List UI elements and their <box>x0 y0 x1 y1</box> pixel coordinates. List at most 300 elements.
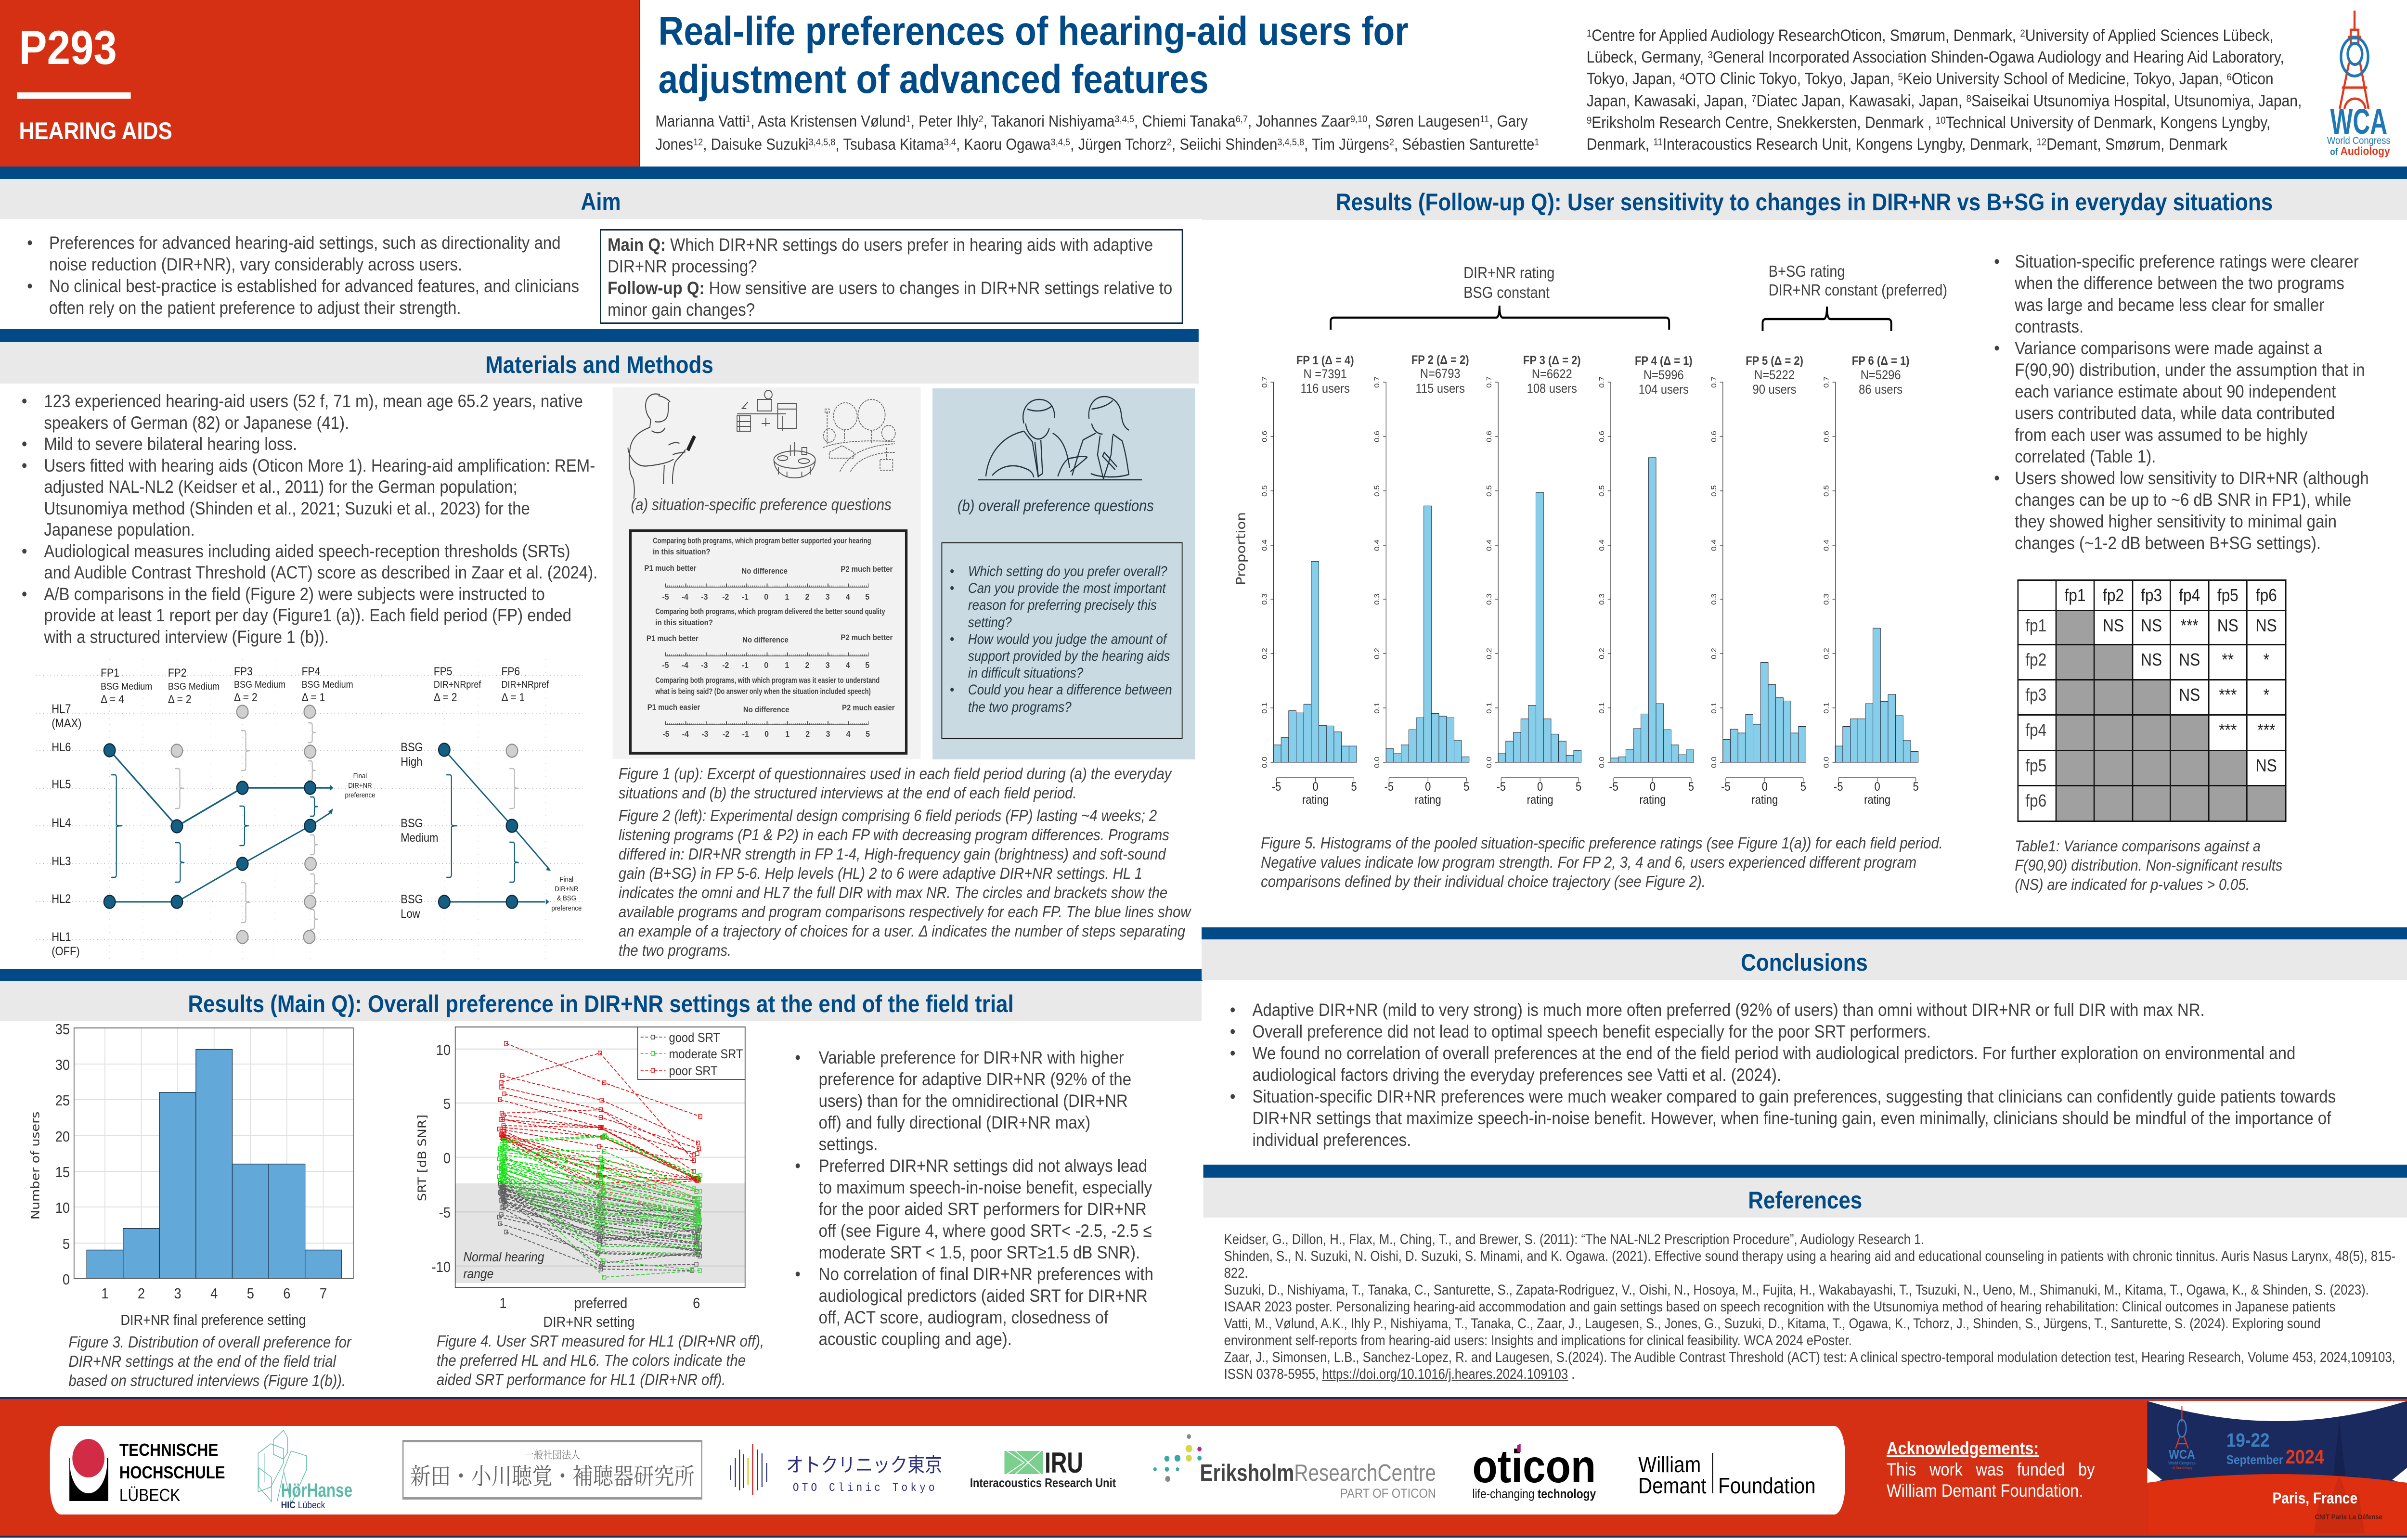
overall questions box: Which setting do you prefer overall? <box>968 564 1167 579</box>
questionnaire box: 2 <box>805 592 809 602</box>
text: • <box>1994 338 2000 358</box>
figures 1 and 2 caption: indicates the omni and HL7 the full DIR with max NR. The circles and brackets show the <box>619 884 1167 902</box>
text: • <box>27 232 33 253</box>
table 1: variance comparisons: NS <box>2179 685 2200 705</box>
questionnaire box: 2 <box>805 729 810 739</box>
figures 1 and 2 caption: Figure 2 (left): Experimental design comprising 6 field periods (FP) lasting ~4 weeks; 2 <box>619 807 1157 825</box>
research questions box: minor gain changes? <box>608 299 755 320</box>
questionnaire box: Comparing both programs, with which program was it easier to understand <box>655 676 880 685</box>
help level labels: HL4 <box>52 816 71 829</box>
dotted grid <box>36 675 583 939</box>
overall questions box: • <box>950 564 954 579</box>
questionnaire box: P2 much easier <box>842 704 895 712</box>
text: • <box>22 391 27 411</box>
histogram FP5: 0.4 <box>1710 539 1718 551</box>
results main bullet text: users) than for the omnidirectional (DIR+NR <box>819 1091 1128 1111</box>
histogram FP6: 5 <box>1913 780 1919 793</box>
histogram FP6: rating <box>1864 793 1890 806</box>
figure 5: histograms of situation-specific ratings <box>1227 260 1963 813</box>
results main bullet text: settings. <box>819 1134 878 1154</box>
normal hearing label: Normal hearing <box>463 1249 544 1264</box>
heading: Results (Main Q) <box>0 981 1202 1021</box>
questionnaire box: 5 <box>865 660 869 670</box>
panel b caption: (b) overall preference questions <box>958 497 1154 514</box>
help level labels: (OFF) <box>52 945 80 958</box>
panel: situation-specific preference questions <box>613 387 920 759</box>
WCA congress banner <box>2147 1401 2407 1533</box>
logo: Shinden-Ogawa institute: 新田・小川聴覚・補聴器研究所 <box>410 1464 695 1489</box>
group label: DIR+NR rating: BSG constant <box>1463 283 1550 301</box>
table 1: variance comparisons: *** <box>2219 685 2237 705</box>
methods bullet text: Audiological measures including aided speech-reception thresholds (SRTs) <box>44 541 570 561</box>
methods bullet text: adjusted NAL-NL2 (Keidser et al., 2011) for the German population; <box>44 476 518 497</box>
histogram FP4: 0.1 <box>1598 702 1606 714</box>
results follow-up bullet text: users contributed data, while data contributed <box>2015 403 2335 423</box>
text: • <box>27 276 33 296</box>
affiliations: 1Centre for Applied Audiology ResearchOticon, Smørum, Denmark, 2University of Applied Sciences Lübeck, <box>1587 26 2274 45</box>
histogram FP3: 0.6 <box>1486 431 1493 442</box>
trajectory lines and arrows <box>110 750 551 905</box>
histogram FP4: 0.4 <box>1598 539 1606 551</box>
topic label <box>17 92 172 144</box>
figures 1 and 2 caption: the two programs. <box>619 942 731 960</box>
text: • <box>1230 999 1235 1019</box>
figure 3 caption <box>68 1333 351 1391</box>
brace: DIR+NR group <box>1331 306 1669 330</box>
logo: Eriksholm Research Centre: EriksholmResearchCentre <box>1200 1459 1436 1486</box>
text: • <box>795 1155 801 1176</box>
histogram FP3: 5 <box>1576 780 1581 793</box>
questionnaire box: Comparing both programs, which program delivered the better sound quality <box>655 607 885 616</box>
histogram FP5: 0.5 <box>1710 485 1718 497</box>
conclusions bullet text: Overall preference did not lead to optimal speech benefit especially for the poor SRT performers. <box>1253 1021 1931 1041</box>
results follow-up bullet text: contrasts. <box>2015 316 2083 336</box>
histogram FP4: N=5996 <box>1643 368 1684 382</box>
table 1 caption: Table1: Variance comparisons against a <box>2015 837 2261 855</box>
table 1: variance comparisons: NS <box>2179 650 2200 669</box>
footer red panel <box>0 1397 2407 1538</box>
affiliations: Denmark, 11Interacoustics Research Unit, Kongens Lyngby, Denmark, 12Demant, Smørum, Denmark <box>1587 135 2227 154</box>
histogram FP3: 0.0 <box>1486 757 1493 768</box>
questionnaire box: -4 <box>682 592 688 602</box>
poor SRT series <box>499 1043 700 1211</box>
grey brackets <box>175 723 519 929</box>
histogram FP1: 0 <box>1312 780 1319 793</box>
figure 2: experimental design diagram: DIR+NRpref <box>501 680 549 690</box>
figure 4 caption: Figure 4. User SRT measured for HL1 (DIR+NR off), <box>437 1333 764 1350</box>
histogram FP6: 0.3 <box>1823 593 1830 605</box>
help level labels <box>52 702 438 958</box>
final preference labels: DIR+NR <box>348 781 372 789</box>
histogram FP5: 0.1 <box>1710 702 1718 714</box>
icon: park with bench and fountain <box>823 399 895 472</box>
figure 5 caption: comparisons defined by their individual choice trajectory (see Figure 2). <box>1261 873 1706 891</box>
x tick labels: 5 <box>247 1285 254 1302</box>
group label: B+SG rating: B+SG rating <box>1769 262 1845 280</box>
histogram FP1: -5 <box>1272 780 1281 793</box>
questionnaire box: in this situation? <box>655 618 713 627</box>
help level labels: HL7 <box>52 702 71 715</box>
logo: Technische Hochschule Lübeck <box>68 1437 237 1504</box>
logo: HörHanse: HIC Lübeck <box>281 1500 325 1510</box>
histogram FP4: 0.7 <box>1598 376 1606 388</box>
figures 1 and 2 caption: gain (B+SG) in FP 5-6. Help levels (HL) 2 to 6 were adaptive DIR+NR settings. HL 1 <box>619 865 1142 883</box>
table 1: variance comparisons: fp1 <box>2025 616 2046 635</box>
histogram FP1: N =7391 <box>1304 367 1347 381</box>
questionnaire box <box>631 531 906 753</box>
WCA congress banner: September <box>2226 1453 2283 1467</box>
y tick labels: 5 <box>443 1096 451 1112</box>
title <box>659 9 1409 102</box>
histogram FP1: FP 1 (Δ = 4) <box>1296 354 1354 367</box>
poster number: P293 <box>19 21 117 74</box>
legend: poor SRT <box>669 1064 718 1078</box>
field period column headers: Δ = 2 <box>234 691 258 704</box>
field period column headers <box>101 665 525 706</box>
histogram bars <box>87 1050 341 1279</box>
location: Paris, France <box>2273 1490 2357 1507</box>
table 1: variance comparisons: fp4 <box>2025 720 2046 740</box>
WCA congress banner: World Congress <box>2168 1461 2196 1465</box>
acknowledgements: William Demant Foundation. <box>1887 1481 2083 1501</box>
x axis label: DIR+NR setting <box>543 1314 634 1330</box>
help level labels: BSG <box>401 893 423 906</box>
figure 2: experimental design diagram: BSG Medium <box>101 681 152 692</box>
figure 4 caption: the preferred HL and HL6. The colors indicate the <box>437 1352 746 1370</box>
questionnaire box: 0 <box>764 592 768 602</box>
methods bullet text: Mild to severe bilateral hearing loss. <box>44 434 297 454</box>
histogram FP3: FP 3 (Δ = 2) <box>1523 354 1581 367</box>
questionnaire box: -5 <box>662 592 669 602</box>
table 1: variance comparisons: * <box>2264 650 2269 669</box>
overall questions box: support provided by the hearing aids <box>968 648 1170 664</box>
conclusions bullet text: audiological factors driving the everyday preferences see Vatti et al. (2024). <box>1253 1065 1781 1085</box>
help level labels: High <box>401 755 422 768</box>
icon: man with phone <box>628 394 686 499</box>
table 1: variance comparisons: *** <box>2257 720 2275 740</box>
table 1: variance comparisons: NS <box>2256 756 2277 775</box>
y tick labels: -5 <box>439 1205 451 1221</box>
methods bullet text: provide at least 1 report per day (Figure1 (a)). Each field period (FP) ended <box>44 605 571 625</box>
questionnaire box: 2 <box>805 660 809 670</box>
heading: Results (Main Q): Results (Main Q): Overall preference in DIR+NR settings at the end of the field trial <box>188 990 1014 1017</box>
figure 3 caption: based on structured interviews (Figure 1(b)). <box>68 1372 346 1390</box>
conclusions bullet text: We found no correlation of overall preferences at the end of the field period with audiological predictors. For further exploration on environmental and <box>1253 1042 2295 1063</box>
icon: office desk <box>737 390 796 431</box>
histogram FP3: 0.3 <box>1486 593 1493 605</box>
figures 1 and 2 caption: an example of a trajectory of choices for a user. Δ indicates the number of steps separating <box>619 923 1185 940</box>
histogram FP1: 116 users <box>1300 382 1350 396</box>
table 1 caption <box>2015 836 2282 894</box>
normal hearing range band <box>455 1183 745 1283</box>
heading: Conclusions: Conclusions <box>1741 949 1868 976</box>
overall questions box: • <box>950 682 954 698</box>
histogram FP2: N=6793 <box>1420 367 1461 381</box>
references list: environment self-reports from hearing-aid users: Insights and implications for clinical feasibility. WCA 2024 ePoster. <box>1224 1333 1852 1348</box>
results follow-up bullet text: from each user was assumed to be highly <box>2015 424 2307 445</box>
blue brackets <box>111 775 519 882</box>
table 1: variance comparisons: fp6 <box>2025 791 2046 810</box>
histogram FP1: 0.6 <box>1261 431 1268 442</box>
text: • <box>1994 251 2000 271</box>
conclusions bullet text: Adaptive DIR+NR (mild to very strong) is much more often preferred (92% of users) than omni without DIR+NR or full DIR with max NR. <box>1253 999 2205 1019</box>
blue band above references <box>1204 1165 2407 1178</box>
logo: William Demant Foundation: Foundation <box>1718 1474 1815 1499</box>
results main bullet text <box>819 1047 1153 1350</box>
histogram FP1: 0.5 <box>1261 485 1268 497</box>
references list: ISAAR 2023 poster. Personalizing hearing-aid accommodation and gain settings based on speech recognition with the Utsunomiya method of hearing rehabilitation: Clinical outcomes in Japanese patients <box>1224 1299 2335 1315</box>
logo: William Demant Foundation <box>1635 1449 1813 1497</box>
conclusions bullet text: individual preferences. <box>1253 1129 1411 1149</box>
research questions box: DIR+NR processing? <box>608 256 757 276</box>
histogram FP3: 0.1 <box>1486 702 1493 714</box>
histogram FP4: 0 <box>1650 780 1656 793</box>
questionnaire box: -4 <box>682 660 688 670</box>
histogram FP5: -5 <box>1721 780 1731 793</box>
histogram FP2: 0.6 <box>1373 431 1381 442</box>
table 1: variance comparisons: fp5 <box>2217 585 2239 605</box>
figure 3 caption: Figure 3. Distribution of overall preference for <box>68 1334 351 1351</box>
table 1: variance comparisons: *** <box>2219 720 2237 740</box>
references list <box>1224 1231 2395 1383</box>
field period column headers: Δ = 2 <box>168 693 192 706</box>
logo: OTO Clinic Tokyo: オトクリニック東京 <box>786 1449 942 1478</box>
good SRT series <box>499 1183 700 1270</box>
logo: Oticon: oticon <box>1473 1440 1596 1492</box>
logo: William Demant Foundation: William <box>1638 1453 1701 1477</box>
questionnaire box: 5 <box>865 592 869 602</box>
WCA congress banner: 2024 <box>2286 1446 2324 1468</box>
field period column headers: FP2 <box>168 667 187 679</box>
histogram FP2: 0.3 <box>1373 593 1381 605</box>
histogram FP3: -5 <box>1497 780 1506 793</box>
questionnaire box: P2 much better <box>841 565 893 574</box>
affiliations: 9Eriksholm Research Centre, Snekkersten, Denmark , 10Technical University of Denmark, Kongens Lyngby, <box>1587 114 2270 132</box>
legend <box>637 1027 745 1079</box>
histogram FP4 <box>1598 354 1694 806</box>
text: • <box>1994 468 2000 488</box>
histogram FP2: 115 users <box>1416 382 1465 396</box>
table 1: variance comparisons: NS <box>2103 616 2124 635</box>
figure 5 caption: Figure 5. Histograms of the pooled situation-specific preference ratings (see Figure 1(a)) for each field period. <box>1261 834 1943 852</box>
moderate SRT series <box>499 1136 700 1277</box>
histogram FP5: rating <box>1751 793 1778 806</box>
histogram FP5: 0.7 <box>1710 376 1718 388</box>
logo: William Demant Foundation: Demant <box>1638 1474 1707 1499</box>
results follow-up bullet text: F(90,90) distribution, under the assumption that in <box>2015 359 2365 380</box>
histogram FP2: -5 <box>1385 780 1394 793</box>
methods bullet text: speakers of German (82) or Japanese (41). <box>44 412 349 433</box>
histogram FP3: 0.4 <box>1486 539 1493 551</box>
histogram FP6: 0.6 <box>1823 431 1830 442</box>
histogram FP2: 0.7 <box>1373 376 1381 388</box>
questionnaire box: 0 <box>764 729 769 739</box>
heading: Results (Follow-up Q) <box>1202 179 2407 220</box>
y tick labels <box>55 1021 70 1288</box>
histogram FP2: 0.2 <box>1373 648 1381 659</box>
overall questions box: setting? <box>968 615 1012 630</box>
methods bullet text: Users fitted with hearing aids (Oticon More 1). Hearing-aid amplification: REM- <box>44 455 595 475</box>
histogram FP3: 108 users <box>1527 382 1577 396</box>
text: • <box>1230 1086 1235 1106</box>
references list: Zaar, J., Simonsen, L.B., Sanchez-Lopez, R. and Laugesen, S.(2024). The Audible Contrast Threshold (ACT) test: A clinical spectro-temporal modulation detection test, Hearing Research, Volume 453, 2024,109103, <box>1224 1350 2395 1365</box>
questionnaire box: -2 <box>722 592 729 602</box>
figures 1 and 2 caption: differed in: DIR+NR strength in FP 1-4, High-frequency gain (brightness) and soft-sound <box>619 846 1166 863</box>
text: • <box>1230 1021 1235 1041</box>
histogram FP2: 5 <box>1463 780 1469 793</box>
logo: OTO Clinic Tokyo: OTO Clinic Tokyo <box>793 1481 938 1494</box>
heading: Materials and Methods: Materials and Methods <box>485 351 713 378</box>
text: • <box>22 584 27 604</box>
histogram FP2: 0.1 <box>1373 702 1381 714</box>
heading: References: References <box>1748 1187 1862 1214</box>
histogram FP6: -5 <box>1834 780 1843 793</box>
text: • <box>795 1264 801 1284</box>
references list: ISSN 0378-5955, https://doi.org/10.1016/j.heares.2024.109103 . <box>1224 1367 1575 1382</box>
aim bullet text: noise reduction (DIR+NR), vary considerably across users. <box>49 254 462 274</box>
histogram FP2 <box>1373 353 1469 806</box>
questionnaire box: 4 <box>846 592 850 602</box>
research questions box: Main Q: Which DIR+NR settings do users prefer in hearing aids with adaptive <box>608 234 1153 255</box>
y tick labels: 10 <box>436 1042 451 1058</box>
x tick labels <box>101 1285 327 1302</box>
references list: 822. <box>1224 1266 1248 1281</box>
text: • <box>795 1047 801 1067</box>
overall questions box: in difficult situations? <box>968 665 1083 681</box>
figure 2: experimental design diagram: BSG Medium <box>168 681 220 692</box>
final preference labels: & BSG <box>557 894 576 902</box>
histogram FP3: 0.7 <box>1486 376 1493 388</box>
histogram FP4: 0.6 <box>1598 431 1606 442</box>
results main bullet text: for the poor aided SRT performers for DIR+NR <box>819 1199 1147 1219</box>
histogram FP4: rating <box>1639 793 1666 806</box>
methods bullet text: and Audible Contrast Threshold (ACT) score as described in Zaar et al. (2024). <box>44 562 597 582</box>
methods bullet text: 123 experienced hearing-aid users (52 f, 71 m), mean age 65.2 years, native <box>44 391 583 411</box>
questionnaire box: 0 <box>764 660 768 670</box>
aim bullet text: No clinical best-practice is established for advanced features, and clinicians <box>49 276 579 296</box>
histogram FP2: FP 2 (Δ = 2) <box>1411 353 1469 366</box>
conclusions bullet text: DIR+NR settings that maximize speech-in-noise benefit. However, when fine-tuning gain, even minimally, clinicians should be mindful of the importance of <box>1253 1108 2331 1128</box>
x tick labels: 1 <box>101 1285 109 1302</box>
histogram FP4: 0.0 <box>1598 757 1606 768</box>
overall questions box: Could you hear a difference between <box>968 682 1172 698</box>
results main bullet text: off) and fully directional (DIR+NR max) <box>819 1112 1090 1132</box>
field period column headers: Δ = 2 <box>434 691 457 704</box>
x tick labels: preferred <box>574 1295 627 1311</box>
methods bullet text: Japanese population. <box>44 519 195 539</box>
help level labels: HL5 <box>52 778 71 791</box>
histogram FP5: N=5222 <box>1754 368 1795 382</box>
panel: overall preference questions <box>932 388 1195 759</box>
results main bullet text: to maximum speech-in-noise benefit, especially <box>819 1177 1152 1197</box>
help level labels: BSG <box>401 741 423 754</box>
histogram FP1: 0.2 <box>1261 648 1268 659</box>
icon: WCA logo: WCA <box>2330 102 2387 141</box>
x tick labels: 3 <box>174 1285 181 1302</box>
overall questions box: reason for preferring precisely this <box>968 597 1157 613</box>
blue band above conclusions <box>1202 927 2407 939</box>
logo: OTO Clinic Tokyo <box>728 1441 948 1499</box>
histogram FP6: 0.2 <box>1823 648 1830 659</box>
field period column headers: FP3 <box>234 665 253 678</box>
questionnaire box: P1 much better <box>645 564 696 573</box>
table 1: variance comparisons <box>2018 579 2287 822</box>
results main bullet text: acoustic coupling and age). <box>819 1329 1012 1349</box>
brace: B+SG group <box>1762 307 1891 331</box>
results main bullet text: Variable preference for DIR+NR with higher <box>819 1047 1124 1067</box>
heading: Aim: Aim <box>581 188 621 215</box>
histogram FP2: rating <box>1415 793 1441 806</box>
acknowledgements: Acknowledgements: <box>1887 1438 2039 1458</box>
x tick labels: 6 <box>693 1295 700 1311</box>
group label: B+SG rating: DIR+NR constant (preferred) <box>1769 281 1947 299</box>
authors <box>655 113 1540 154</box>
histogram FP6: 0.5 <box>1823 485 1830 497</box>
heading: References <box>1204 1178 2407 1218</box>
logo: Interacoustics Research Unit: Interacoustics Research Unit <box>970 1476 1116 1490</box>
questionnaire box: -4 <box>682 729 689 739</box>
conclusions bullet text <box>1253 999 2336 1150</box>
final preference labels <box>345 771 582 912</box>
y tick labels <box>432 1042 451 1275</box>
figures 1 and 2 caption: situations and (b) the structured interviews at the end of each field period. <box>619 784 1077 802</box>
header red panel: poster number and topic <box>0 0 640 167</box>
final preference labels: preference <box>345 791 375 799</box>
histogram FP6: 0.4 <box>1823 539 1830 551</box>
grey circles <box>171 706 518 943</box>
results main bullet text: preference for adaptive DIR+NR (92% of the <box>819 1069 1131 1089</box>
histogram FP6 <box>1823 354 1919 806</box>
histogram FP1: 0.7 <box>1261 376 1268 388</box>
field period column headers: FP1 <box>101 667 119 679</box>
overall questions box: • <box>950 580 954 596</box>
y tick labels: 5 <box>63 1236 70 1252</box>
references list: Suzuki, D., Nishiyama, T., Tanaka, C., Santurette, S., Zapata-Rodriguez, V., Oishi, N., Hosoya, M., Fujita, H., Wakabayashi, T., Tsuzuki, N., Ueno, M., Shimanuki, M., Kitama, T., Ogawa, K., & Shinden, S. (2023). <box>1224 1283 2369 1298</box>
questionnaire box: No difference <box>742 636 789 644</box>
acknowledgements <box>1887 1438 2095 1502</box>
questionnaire box: -2 <box>723 729 729 739</box>
affiliations <box>1587 26 2302 154</box>
research questions box: Follow-up Q: How sensitive are users to changes in DIR+NR settings relative to <box>608 278 1172 298</box>
field period column headers: FP5 <box>434 665 453 678</box>
results follow-up bullet text: was large and became less clear for smaller <box>2015 295 2324 315</box>
results main bullet text: off, ACT score, audiogram, closedness of <box>819 1307 1108 1327</box>
acknowledgements: This work was funded by <box>1887 1460 2095 1479</box>
y tick labels: 30 <box>55 1057 70 1073</box>
results follow-up bullet text: they showed higher sensitivity to minimal gain <box>2015 511 2337 531</box>
questionnaire box: 4 <box>846 729 851 739</box>
logo: Eriksholm Research Centre: PART OF OTICON <box>1340 1487 1436 1501</box>
results main bullet text: audiological predictors (aided SRT for DIR+NR <box>819 1285 1148 1306</box>
questionnaire box: 3 <box>826 660 830 670</box>
x tick labels: 2 <box>138 1285 145 1302</box>
final preference labels: DIR+NR <box>555 885 579 893</box>
logo: Technische Hochschule Lübeck: TECHNISCHE <box>119 1440 218 1460</box>
aim bullet text: Preferences for advanced hearing-aid settings, such as directionality and <box>49 232 561 253</box>
histogram FP1: 0.4 <box>1261 539 1268 551</box>
help level labels: Low <box>401 907 421 920</box>
questionnaire box: -1 <box>742 729 749 739</box>
questionnaire box: -3 <box>701 660 708 670</box>
table 1: variance comparisons: fp6 <box>2256 585 2277 605</box>
methods bullet text <box>44 390 597 648</box>
logo: Oticon: life-changing technology <box>1473 1487 1596 1501</box>
help level labels: Medium <box>401 831 438 844</box>
histogram FP2: 0.4 <box>1373 539 1381 551</box>
blue band above methods <box>0 329 1199 342</box>
overall questions box: the two programs? <box>968 699 1072 715</box>
table 1: variance comparisons: * <box>2264 685 2269 705</box>
